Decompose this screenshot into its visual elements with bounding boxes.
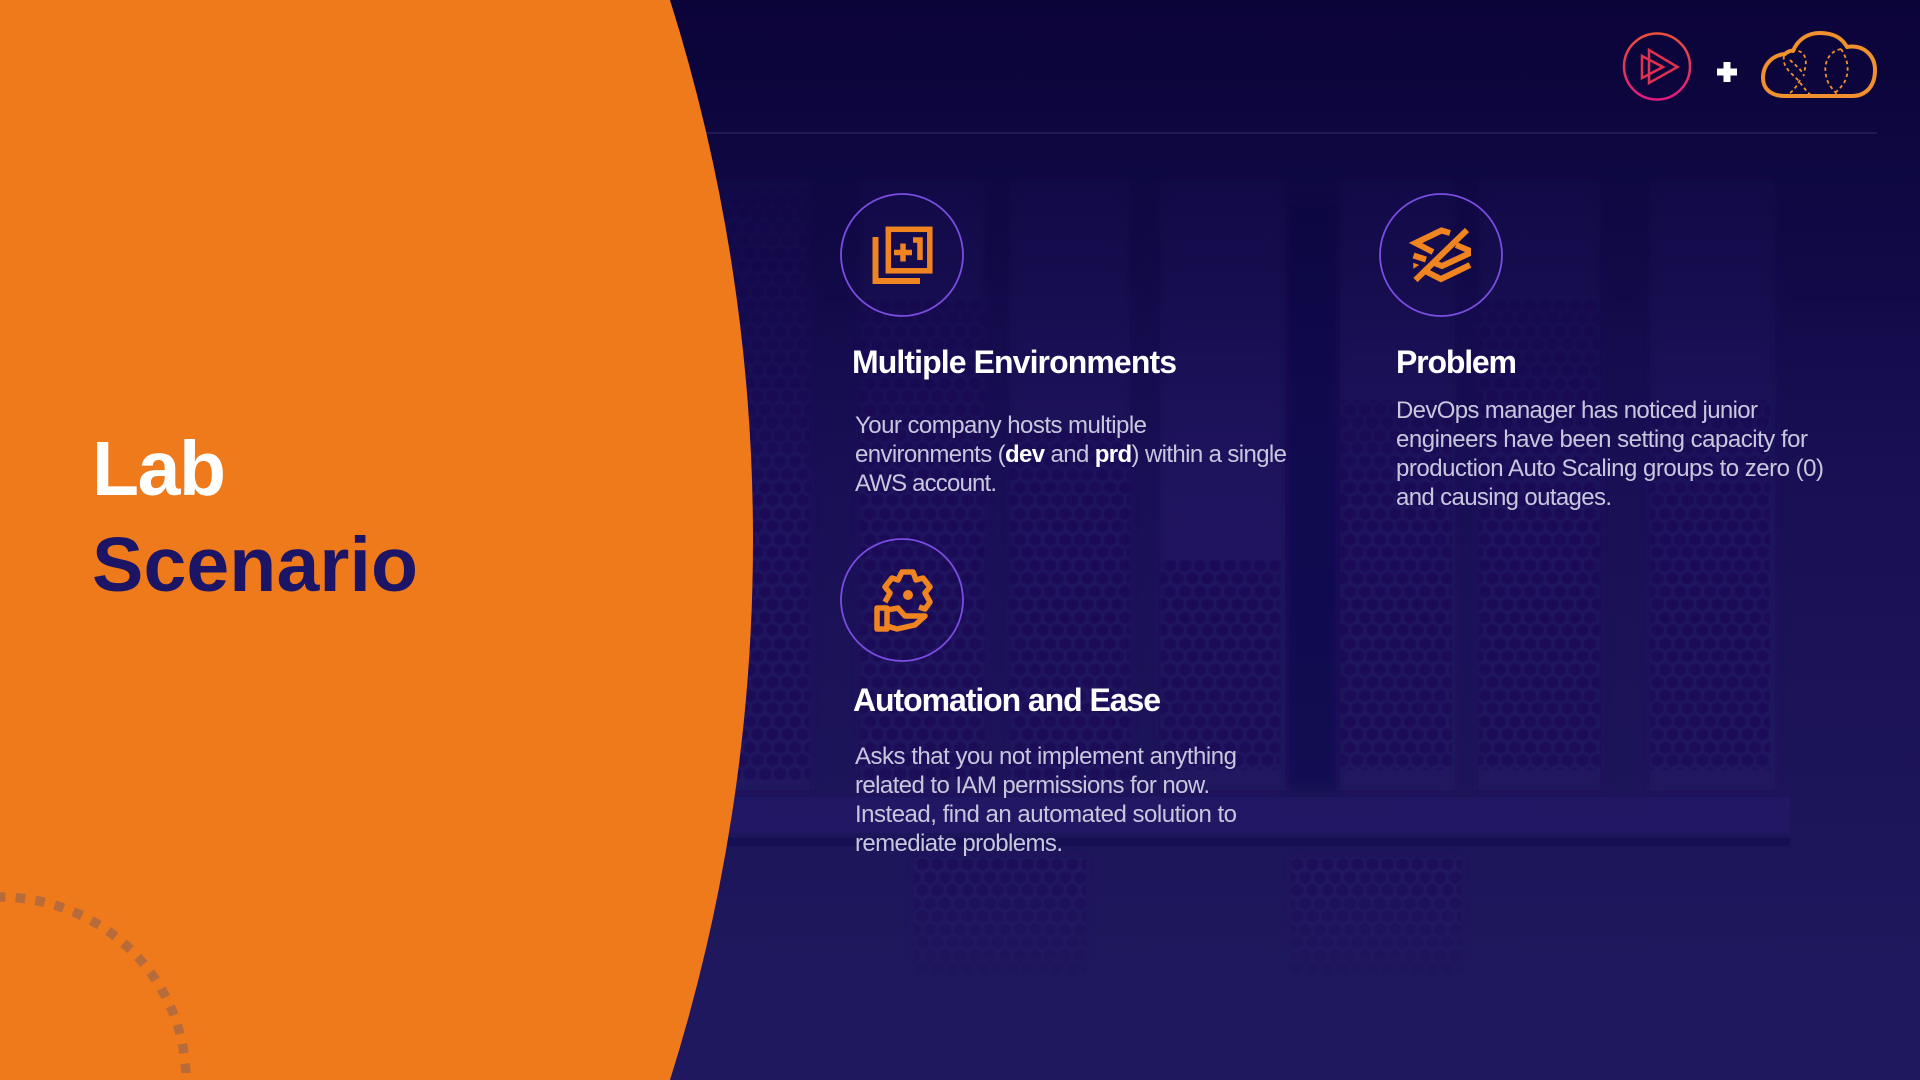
body text: AWS account.: [855, 470, 997, 497]
title: [92, 426, 418, 608]
body text: Asks that you not implement anything: [855, 743, 1237, 770]
decorative dotted arc: [0, 897, 186, 1080]
heading: Multiple Environments: [852, 344, 1177, 380]
body text: related to IAM permissions for now.: [855, 772, 1210, 799]
logo: cloud: [1763, 33, 1875, 96]
body text: Your company hosts multiple: [855, 412, 1147, 439]
icon: hand with gear: [841, 539, 963, 661]
body text: environments (dev and prd) within a single: [855, 441, 1287, 468]
body text: production Auto Scaling groups to zero (0): [1396, 455, 1824, 482]
icon: crossed layers: [1380, 194, 1502, 316]
panel: automation and ease: [841, 539, 1237, 857]
heading: Problem: [1396, 344, 1517, 380]
body text: Instead, find an automated solution to: [855, 801, 1237, 828]
icon: layers plus one: [841, 194, 963, 316]
body text: [855, 412, 1287, 497]
header divider line: [700, 132, 1877, 134]
title: Lab: [92, 426, 226, 512]
panel: problem: [1380, 194, 1824, 511]
panel: multiple environments: [841, 194, 1287, 497]
body text: [1396, 397, 1824, 511]
body text: DevOps manager has noticed junior: [1396, 397, 1758, 424]
body text: and causing outages.: [1396, 484, 1612, 511]
logo: play icon: [1624, 34, 1690, 100]
plus sign: [1717, 62, 1737, 82]
orange left panel: [0, 0, 753, 1080]
body text: [855, 743, 1237, 857]
heading: Automation and Ease: [853, 682, 1161, 718]
body text: engineers have been setting capacity for: [1396, 426, 1808, 453]
body text: remediate problems.: [855, 830, 1063, 857]
title: Scenario: [92, 522, 418, 608]
